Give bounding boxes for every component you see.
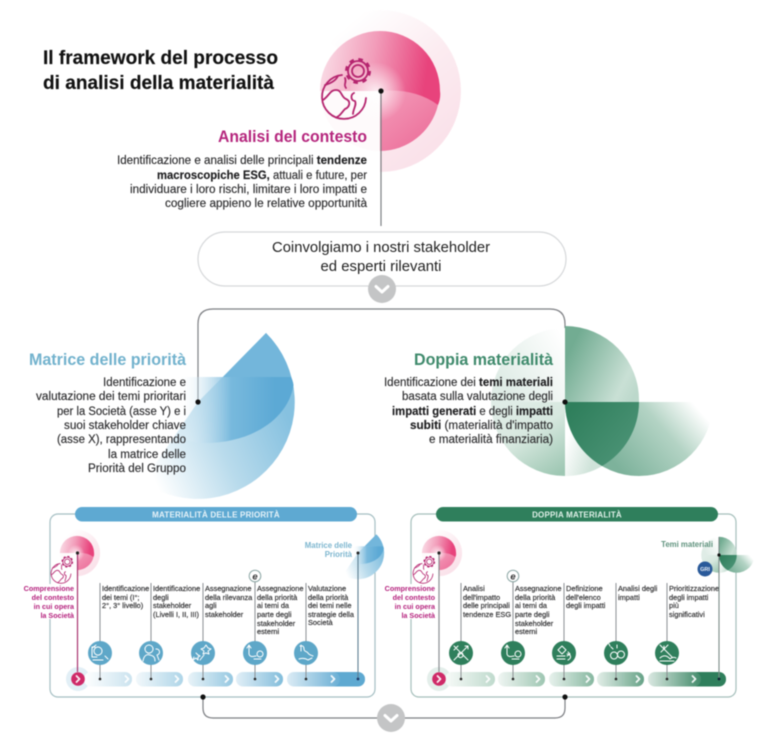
step 1: dell'impatto (463, 593, 500, 602)
panel: doppia materialità (385, 507, 755, 697)
text: Matrice delle priorità description: (asse X), rappresentando (57, 434, 186, 446)
mini globe icon (413, 557, 434, 583)
step 4 (243, 570, 303, 680)
label: Comprensione del contesto: Comprensione (24, 584, 74, 593)
step 2: Assegnazione (515, 584, 561, 593)
icon: GRI badge: GRI (700, 567, 710, 573)
label: Temi materiali: Temi materiali (661, 540, 713, 549)
text: Doppia materialità description: Identificazione dei temi materiali (384, 377, 553, 389)
step 4: e (252, 572, 258, 582)
icon: globe and gear (322, 60, 370, 119)
text: Analisi del contesto description: macroscopiche ESG, attuali e future, per (157, 170, 367, 182)
step 5 (655, 583, 719, 680)
step 3: stakeholder (205, 610, 244, 619)
step 5: significativi (669, 610, 705, 619)
text: Doppia materialità description: basata sulla valutazione degli (402, 391, 553, 403)
text: Doppia materialità description: e materialità finanziaria) (429, 434, 553, 446)
final timeline line (717, 537, 721, 680)
step 2: della priorità (515, 593, 556, 602)
step 4 (604, 583, 658, 680)
heading: Doppia materialità: Doppia materialità (414, 350, 554, 369)
step 1: Identificazione (102, 584, 149, 593)
stakeholder pill (198, 232, 566, 286)
header: doppia materialità: DOPPIA MATERIALITÀ (532, 510, 622, 520)
header: materialità delle priorità: MATERIALITÀ DELLE PRIORITÀ (152, 510, 280, 520)
label: Comprensione del contesto: del contesto (32, 593, 75, 602)
heading: Matrice delle priorità: Matrice delle priorità (29, 350, 187, 369)
text: Doppia materialità description (384, 377, 553, 446)
icon: chevron down (368, 275, 396, 303)
label: Matrice delle Priorità: Matrice delle (305, 541, 353, 550)
step 5: Prioritizzazione (669, 584, 719, 593)
step 1: delle principali (463, 601, 510, 610)
step 1: 2°, 3° livello) (102, 601, 143, 610)
progress bar (427, 667, 726, 691)
step 3: Definizione (566, 584, 603, 593)
step 3: Assegnazione (205, 584, 251, 593)
anchor dots (195, 399, 568, 405)
text: Matrice delle priorità description (36, 377, 186, 475)
step 3: degli impatti (566, 601, 606, 610)
step 2: Identificazione (153, 584, 200, 593)
text: Doppia materialità description: impatti generati e degli impatti (392, 406, 553, 418)
label: Comprensione del contesto: in cui opera (395, 602, 436, 611)
stakeholder pill: ed esperti rilevanti (320, 259, 442, 275)
step 5: dei temi nelle (308, 601, 352, 610)
icon: GRI badge (698, 562, 712, 576)
step 4: Assegnazione (257, 584, 303, 593)
step 5: Valutazione (308, 584, 346, 593)
title: Il framework del processo (43, 47, 278, 69)
step 5: della priorità (308, 593, 349, 602)
icon: bottom chevron down (377, 704, 405, 732)
label: Comprensione del contesto: la Società (40, 611, 75, 620)
stakeholder pill: Coinvolgiamo i nostri stakeholder (272, 240, 490, 256)
step 4: parte degli (257, 610, 292, 619)
text: Analisi del contesto description (117, 155, 368, 210)
text: Matrice delle priorità description: per la Società (asse Y) e i (57, 406, 186, 418)
connector: bottom link between panels (200, 694, 568, 718)
connector: split to both branches (198, 309, 565, 402)
label: Comprensione del contesto: del contesto (393, 593, 436, 602)
step 3: agli (205, 601, 217, 610)
step 5: Società (308, 618, 334, 627)
green double materiality shape (491, 326, 713, 476)
step 4: ai temi da (257, 601, 290, 610)
step 3 (552, 583, 606, 680)
step 2 (501, 570, 561, 680)
connector: context to pill (378, 88, 384, 226)
text: Doppia materialità description: subiti (materialità d'impatto (410, 420, 553, 432)
label: Matrice delle Priorità (305, 541, 353, 559)
step 3: dell'elenco (566, 593, 601, 602)
step 2: (Livelli I, II, III) (153, 610, 199, 619)
blue priority shape (143, 333, 295, 499)
step 1 (449, 583, 511, 680)
title: di analisi della materialità (43, 72, 274, 94)
text: Matrice delle priorità description: Identificazione e (103, 377, 186, 389)
step 1: Analisi (463, 584, 485, 593)
title (43, 47, 278, 94)
step 2: esterni (515, 627, 538, 636)
step 3: della rilevanza (205, 593, 253, 602)
text: Matrice delle priorità description: suoi stakeholder chiave (64, 420, 186, 432)
step 2: stakeholder (515, 619, 554, 628)
context timeline line (76, 551, 79, 672)
step 2: e (510, 572, 516, 582)
label: Comprensione del contesto: in cui opera (34, 602, 75, 611)
step 2: parte degli (515, 610, 550, 619)
mini matrix shape (343, 534, 384, 579)
step 2: stakeholder (153, 601, 192, 610)
step 2: degli (153, 593, 169, 602)
mini globe icon (51, 557, 72, 583)
white gap behind context label (385, 584, 437, 619)
heading: Analisi del contesto: Analisi del contesto (218, 127, 367, 146)
label: Matrice delle Priorità: Priorità (325, 550, 353, 559)
step 4: stakeholder (257, 619, 296, 628)
step 4: Analisi degli (618, 584, 658, 593)
text: Matrice delle priorità description: valutazione dei temi prioritari (36, 391, 186, 403)
start marker (71, 672, 85, 686)
step 1 (88, 583, 149, 680)
step 5 (294, 583, 355, 680)
text: Analisi del contesto description: Identificazione e analisi delle principali tendenze (117, 155, 367, 167)
label: Comprensione del contesto: Comprensione (385, 584, 435, 593)
panel: materialità delle priorità (24, 507, 384, 697)
header: materialità delle priorità (75, 507, 357, 522)
step 4: della priorità (257, 593, 298, 602)
context timeline line (437, 551, 441, 672)
step 4: impatti (618, 593, 640, 602)
label: Comprensione del contesto: la Società (401, 611, 436, 620)
step 5: più (669, 601, 679, 610)
step 3 (191, 583, 253, 680)
text: Matrice delle priorità description: la matrice delle (108, 449, 186, 461)
progress bar (66, 667, 365, 691)
step 2 (139, 583, 200, 680)
label: Comprensione del contesto (385, 584, 436, 620)
step 2: ai temi da (515, 601, 548, 610)
mini themes shape (701, 537, 755, 573)
step 5: degli impatti (669, 593, 709, 602)
label: Comprensione del contesto (24, 584, 75, 620)
final timeline line (356, 552, 360, 680)
white gap behind context label (24, 584, 76, 619)
step 1: tendenze ESG (463, 610, 511, 619)
header: doppia materialità (436, 507, 718, 522)
start marker (432, 672, 446, 686)
step 4: esterni (257, 627, 280, 636)
mini context circle (422, 530, 462, 576)
text: Analisi del contesto description: individuare i loro rischi, limitare i loro impatti e (130, 184, 367, 196)
text: Matrice delle priorità description: Priorità del Gruppo (88, 463, 186, 475)
mini context circle (60, 530, 100, 576)
pink context circle (320, 10, 461, 172)
step 5: strategie della (308, 610, 355, 619)
text: Analisi del contesto description: cogliere appieno le relative opportunità (165, 198, 368, 210)
step 1: dei temi (I°; (102, 593, 139, 602)
